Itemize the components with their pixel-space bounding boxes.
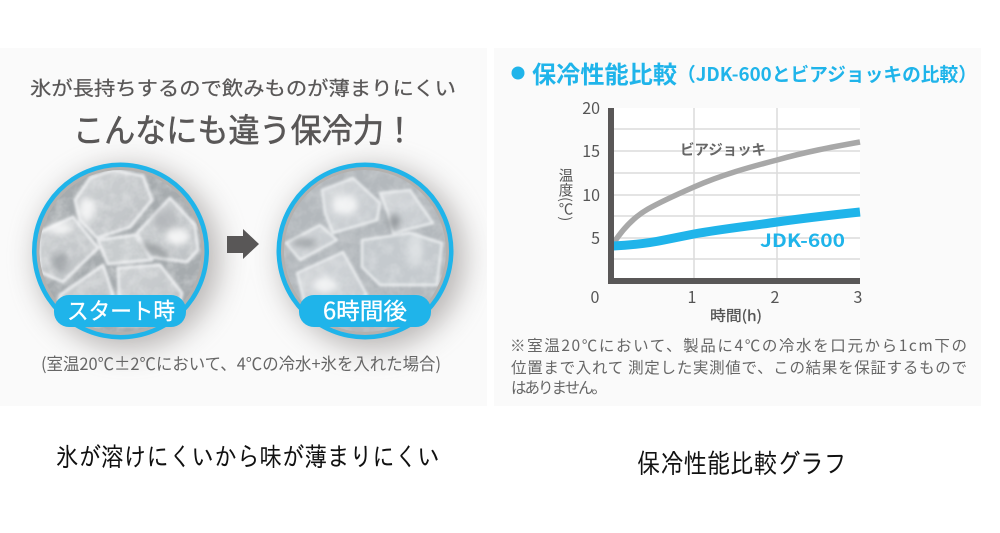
caption: graph: 保冷性能比較グラフ (637, 450, 847, 477)
chart heading: 保冷性能比較 (532, 55, 677, 90)
y axis values: 10 (582, 182, 600, 206)
chart subheading: （JDK-600とビアジョッキの比較） (677, 60, 977, 87)
label: after six hours (299, 292, 431, 327)
x axis values: 2 (771, 284, 780, 308)
drop shadows (36, 166, 465, 350)
y axis values: 20 (582, 95, 600, 119)
glass: start (32, 162, 209, 340)
x axis values (591, 284, 862, 308)
label: after six hours: 6時間後 (323, 292, 407, 326)
series: beer mug (613, 142, 860, 244)
bullet (512, 66, 524, 80)
footnote: 位置まで入れて 測定した実測値で、この結果を保証するもので (511, 356, 967, 378)
y axis values: 15 (582, 138, 600, 162)
y axis values (582, 95, 600, 249)
series label: JDK-600: JDK-600 (760, 227, 845, 253)
condition caption: (室温20℃±2℃において、4℃の冷水+氷を入れた場合) (41, 350, 441, 375)
arrow (227, 229, 259, 259)
x axis values: 3 (854, 284, 862, 308)
footnote (510, 334, 967, 398)
x axis values: 1 (688, 284, 696, 308)
y axis values: 5 (591, 225, 600, 249)
panel: cooling performance (494, 48, 981, 406)
series: JDK-600 (613, 212, 860, 246)
axes (611, 108, 860, 281)
glass: after six hours (276, 162, 454, 340)
x axis values: 0 (591, 284, 600, 308)
x axis title: 時間(h) (710, 305, 762, 326)
subheading: 氷が長持ちするので飲みものが薄まりにくい (30, 72, 456, 101)
series label: beer mug: ビアジョッキ (680, 139, 766, 160)
footnote: はありません。 (511, 376, 607, 398)
caption: ice: 氷が溶けにくいから味が薄まりにくい (56, 444, 440, 470)
panel: ice comparison (14, 78, 486, 374)
heading: こんなにも違う保冷力！ (73, 104, 415, 152)
line chart (556, 95, 862, 326)
footnote: ※室温20℃において、製品に4℃の冷水を口元から1cm下の (510, 334, 967, 356)
label: start: スタート時 (67, 292, 175, 326)
y axis title: 温度(℃) (556, 168, 576, 221)
